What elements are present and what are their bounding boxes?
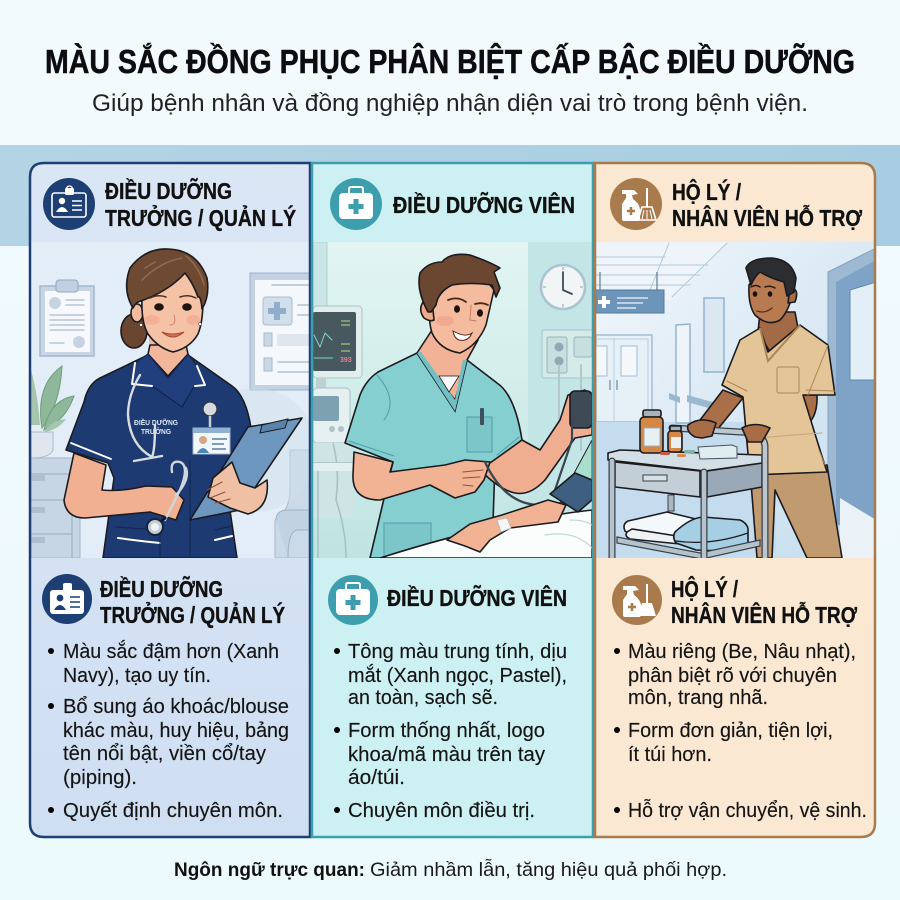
- trolley: [608, 410, 770, 559]
- name badge text: [134, 418, 178, 434]
- bullet list 1: (piping).: [63, 766, 137, 789]
- eyes and mouth: [454, 305, 460, 313]
- bed: [380, 510, 592, 558]
- neck: [417, 330, 478, 400]
- right door: [828, 248, 876, 558]
- rear post: [668, 495, 674, 511]
- bullet list 1: Bổ sung áo khoác/blouse: [63, 695, 289, 718]
- hands on handle: [688, 420, 716, 438]
- panel: điều dưỡng viên: [312, 163, 594, 837]
- hanging sign: [596, 290, 664, 313]
- subtitle: Giúp bệnh nhân và đồng nghiệp nhận diện vai trò trong bệnh viện.: [92, 90, 808, 117]
- heading 1: [105, 177, 296, 231]
- bullet list 1: khác màu, huy hiệu, bảng: [63, 719, 289, 742]
- bullet list 3: [614, 640, 867, 822]
- face: [749, 270, 793, 323]
- teal scrub: [345, 353, 522, 558]
- face: [429, 278, 494, 353]
- bullet list 2: mắt (Xanh ngọc, Pastel),: [348, 664, 567, 687]
- neck: [149, 336, 156, 346]
- neck: [758, 312, 798, 352]
- heading 1: TRƯỞNG / QUẢN LÝ: [105, 203, 296, 231]
- heading 1 lower: TRƯỞNG / QUẢN LÝ: [100, 600, 285, 628]
- heading 2: ĐIỀU DƯỠNG VIÊN: [393, 191, 575, 218]
- icon: medical bag lower: [328, 575, 378, 625]
- bullet list 2: Form thống nhất, logo: [348, 719, 545, 742]
- hand on clipboard: [208, 462, 267, 514]
- chair: [275, 450, 310, 558]
- watermark: [238, 388, 309, 512]
- panel 3 illustration: [596, 242, 876, 559]
- pants: [750, 465, 842, 558]
- heading 3: NHÂN VIÊN HỖ TRỢ: [672, 203, 862, 231]
- bottles: [640, 410, 682, 453]
- bullet list 2: [334, 640, 567, 822]
- chest pocket and pen: [467, 408, 492, 452]
- panel: điều dưỡng trưởng / quản lý: [30, 163, 317, 837]
- lower shelf: [617, 537, 760, 559]
- blood pressure bulb: [570, 391, 592, 428]
- heading 3 lower: NHÂN VIÊN HỖ TRỢ: [671, 600, 857, 628]
- wall clock: [541, 265, 585, 309]
- heading 3 lower: HỘ LÝ /: [671, 575, 738, 602]
- corridor walls: [596, 298, 776, 558]
- drawer: [615, 462, 700, 497]
- bullet list 1: Quyết định chuyên môn.: [63, 799, 283, 822]
- bullet list 3: Màu riêng (Be, Nâu nhạt),: [628, 640, 856, 663]
- icon: cleaning supplies lower: [612, 575, 662, 625]
- bullet list 2: Chuyên môn điều trị.: [348, 799, 535, 822]
- support worker figure: [700, 258, 842, 558]
- hair: [419, 254, 500, 312]
- ear: [131, 304, 143, 322]
- ID badge: [193, 402, 230, 454]
- bullet list 2: Tông màu trung tính, dịu: [348, 640, 567, 663]
- icon: medical bag: [330, 178, 382, 230]
- arm left: [64, 453, 184, 520]
- cabinet: [31, 458, 80, 558]
- bullet list 3: môn, trang nhã.: [628, 686, 768, 709]
- cuff and sleeve: [565, 440, 592, 497]
- male nurse figure: [345, 254, 592, 558]
- pills and box: [660, 445, 737, 459]
- heading 2 lower: ĐIỀU DƯỠNG VIÊN: [387, 584, 567, 611]
- eyes and mouth: [753, 291, 757, 297]
- held stethoscope: [165, 462, 187, 520]
- bullet list 2: an toàn, sạch sẽ.: [348, 686, 498, 709]
- bullet list 2: khoa/mã màu trên tay: [348, 743, 546, 766]
- face: [142, 272, 203, 352]
- hair: [127, 249, 208, 309]
- footer: Ngôn ngữ trực quan:: [174, 859, 365, 881]
- patient arm and hand: [447, 500, 566, 552]
- hair: [746, 258, 796, 296]
- icon: staff ID card lower: [42, 574, 92, 624]
- ventilator: [313, 388, 353, 558]
- white towels: [624, 512, 700, 540]
- bullet list 3: ít túi hơn.: [628, 743, 712, 766]
- legs: [612, 461, 704, 558]
- wall sockets: [542, 330, 594, 450]
- name badge text: TRƯỞNG: [141, 427, 171, 436]
- hair bun: [121, 314, 147, 348]
- name badge text: ĐIỀU DƯỠNG: [134, 417, 178, 427]
- right arm: [753, 395, 817, 437]
- bullet list 1: [48, 640, 289, 822]
- tray: [608, 450, 762, 471]
- panel: hộ lý / nhân viên hỗ trợ: [595, 163, 876, 837]
- left arm and hand: [353, 452, 490, 500]
- icon: staff ID card: [43, 178, 95, 230]
- blue towels: [674, 517, 748, 551]
- stethoscope: [128, 375, 162, 461]
- collar: [132, 354, 205, 407]
- right arm: [480, 390, 592, 493]
- heading 3: [672, 178, 862, 231]
- sleeve stripe: [71, 443, 111, 459]
- handle: [672, 428, 765, 558]
- bullet list 1: tên nổi bật, viền cổ/tay: [63, 742, 267, 765]
- beige scrub: [722, 325, 835, 475]
- bullet list 2: áo/túi.: [348, 766, 405, 789]
- potted plant: [31, 366, 74, 458]
- patient monitor: [313, 306, 362, 390]
- icon: cleaning supplies: [610, 178, 662, 230]
- left arm: [700, 390, 743, 430]
- bullet list 3: Hỗ trợ vận chuyển, vệ sinh.: [628, 799, 867, 822]
- info board on wall: [250, 273, 312, 390]
- panel 1 illustration: [31, 242, 317, 558]
- BP tube: [485, 462, 565, 506]
- heading 1 lower: ĐIỀU DƯỠNG: [100, 575, 223, 602]
- heading 3: HỘ LÝ /: [672, 178, 742, 205]
- back doors: [596, 335, 652, 422]
- bullet list 1: Navy), tạo uy tín.: [63, 664, 211, 687]
- bullet list 3: phân biệt rõ với chuyên: [628, 664, 837, 687]
- patient monitor: 393: [340, 357, 352, 364]
- bullet list 1: Màu sắc đậm hơn (Xanh: [63, 640, 279, 663]
- navy uniform: [66, 355, 251, 558]
- clipboard on wall: [40, 280, 94, 356]
- ceiling: [596, 242, 728, 300]
- nurse manager figure: [64, 249, 302, 558]
- footer: Giảm nhầm lẫn, tăng hiệu quả phối hợp.: [370, 858, 727, 881]
- heading 1: ĐIỀU DƯỠNG: [105, 177, 232, 204]
- heading 3 lower: [671, 575, 857, 628]
- footer: [174, 858, 727, 881]
- panel 2 illustration: [313, 242, 594, 558]
- clipboard held: [190, 418, 302, 520]
- eyes and mouth: [154, 303, 164, 311]
- bullet list 3: Form đơn giản, tiện lợi,: [628, 719, 833, 742]
- heading 1 lower: [100, 575, 285, 628]
